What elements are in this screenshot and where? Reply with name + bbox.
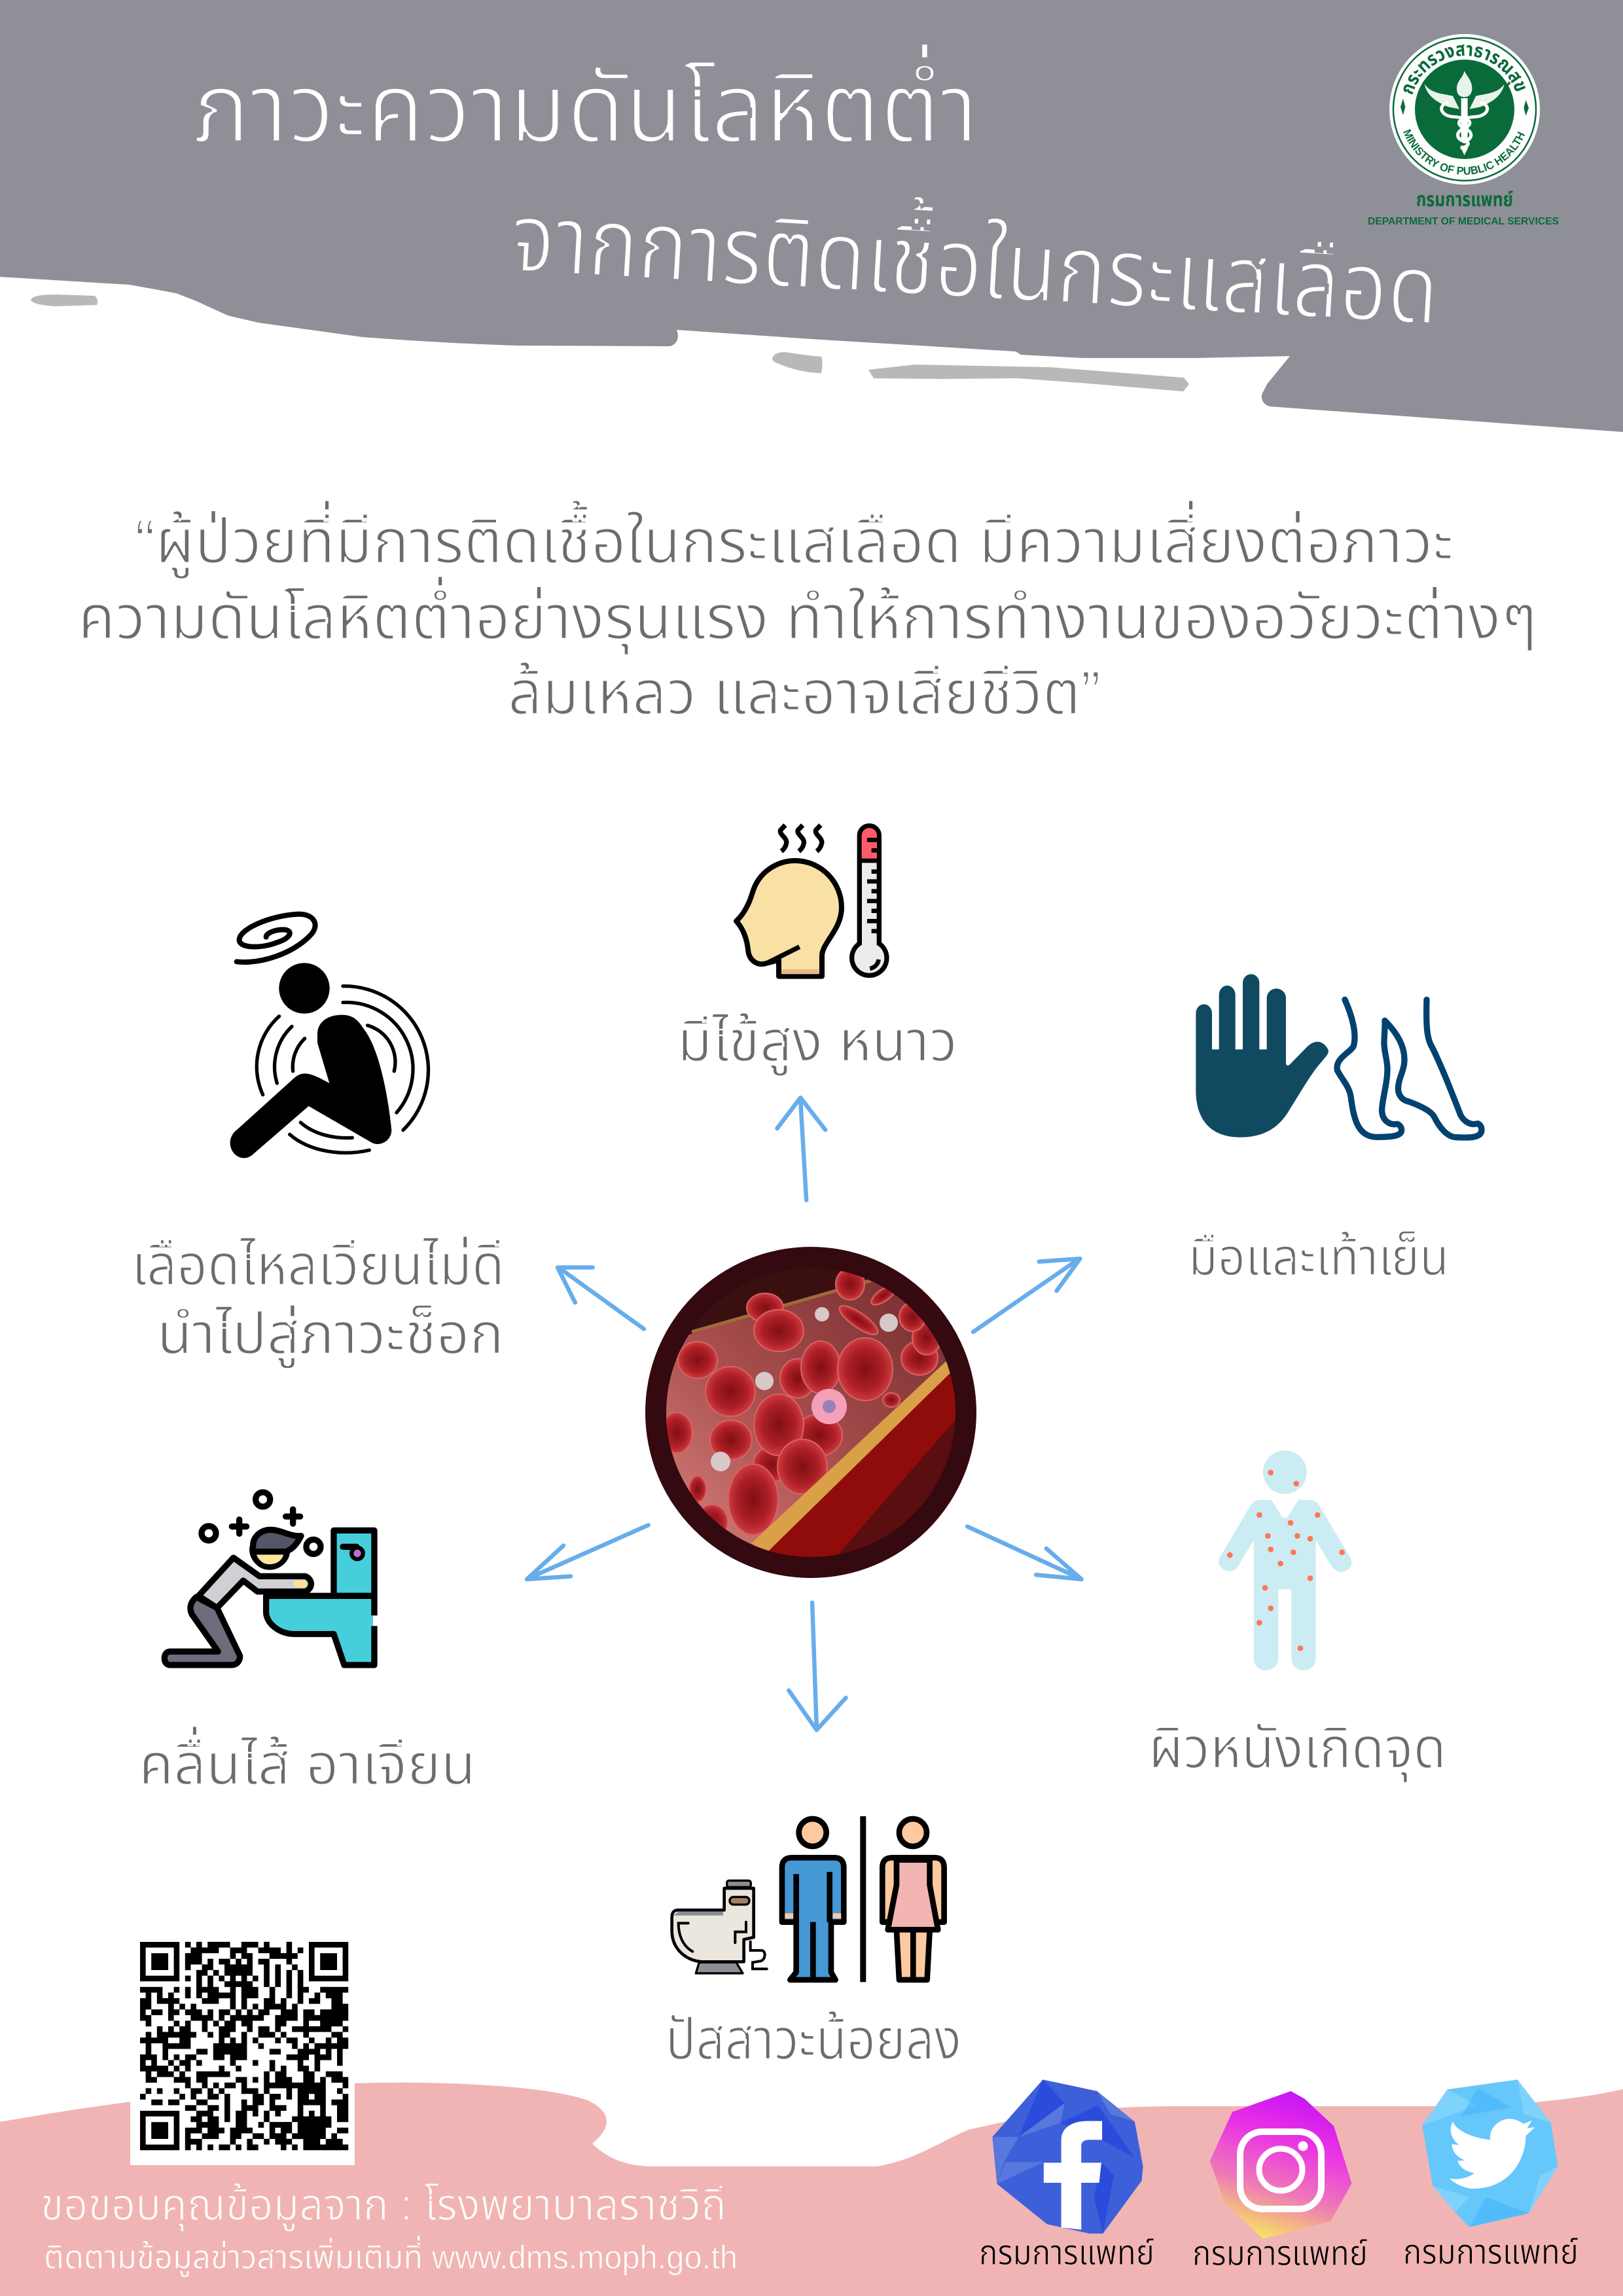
label: fever and chills: มีไข้สูง หนาว [677, 1009, 957, 1076]
logo: ministry of public health: DEPARTMENT OF MEDICAL SERVICES [1368, 216, 1559, 227]
label: nausea and vomiting: คลื่นไส้ อาเจียน [139, 1726, 476, 1797]
social labels: กรมการแพทย์ [979, 2233, 1154, 2272]
label: poor circulation leading to shock [132, 1232, 505, 1369]
arrow: up [777, 1098, 825, 1200]
logo: ministry of public health: กรมการแพทย์ [1416, 189, 1513, 211]
arrow: upper right [973, 1259, 1080, 1332]
quote text [78, 500, 1537, 728]
icon: instagram [1210, 2091, 1352, 2239]
label: skin spots: ผิวหนังเกิดจุด [1149, 1715, 1446, 1783]
quote text: ความดันโลหิตต่ำอย่างรุนแรง ทำให้การทำงานของอวัยวะต่างๆ [78, 576, 1537, 655]
logo: ministry of public health [1368, 34, 1559, 227]
white blood cells [711, 1307, 898, 1471]
vessel wall [769, 1373, 955, 1557]
label: decreased urination: ปัสสาวะน้อยลง [666, 2007, 961, 2072]
social labels: กรมการแพทย์ [1192, 2234, 1368, 2273]
arrows [527, 1098, 1082, 1730]
arrow: lower right [967, 1526, 1082, 1579]
logo: ministry of public health: MINISTRY OF PUBLIC HEALTH [1403, 129, 1525, 175]
quote text: “ผู้ป่วยที่มีการติดเชื้อในกระแสเลือด มีความเสี่ยงต่อภาวะ [135, 500, 1454, 579]
icon: toilet and restroom figures [672, 1816, 944, 1982]
title line 1: ภาวะความดันโลหิตต่ำ [193, 43, 978, 163]
icon: cold hand and feet [1196, 974, 1482, 1138]
icon: person with skin spots [1219, 1450, 1351, 1670]
arrow: lower left [527, 1525, 649, 1579]
arrow: down [789, 1603, 846, 1730]
icon: fever head and thermometer [736, 825, 887, 977]
social labels: กรมการแพทย์ [1403, 2233, 1578, 2272]
icon: facebook [992, 2079, 1143, 2234]
title line 2: จากการติดเชื้อในกระแสเลือด [508, 172, 1442, 346]
social labels [979, 2233, 1578, 2273]
footer website text: ติดตามข้อมูลข่าวสารเพิ่มเติมที่ www.dms.moph.go.th [44, 2235, 738, 2277]
icon: twitter [1422, 2079, 1558, 2227]
central image: blood vessel [645, 1247, 976, 1578]
blood cells [661, 1268, 941, 1539]
header banner [0, 0, 1623, 432]
label: cold hands and feet: มือและเท้าเย็น [1188, 1228, 1449, 1286]
quote text: ล้มเหลว และอาจเสียชีวิต” [508, 658, 1101, 728]
label: poor circulation leading to shock: นำไปสู่ภาวะช็อก [157, 1301, 504, 1369]
label: poor circulation leading to shock: เลือดไหลเวียนไม่ดี [132, 1232, 505, 1297]
QR code [130, 1931, 355, 2165]
footer band [0, 2083, 1623, 2296]
icon: dizzy person [230, 914, 429, 1158]
logo: ministry of public health: กระทรวงสาธารณสุข [1403, 45, 1526, 94]
icon: vomiting person at toilet [164, 1492, 379, 1665]
arrow: upper left [558, 1268, 644, 1329]
footer credit text: ขอขอบคุณข้อมูลจาก : โรงพยาบาลราชวิถี [41, 2180, 726, 2232]
